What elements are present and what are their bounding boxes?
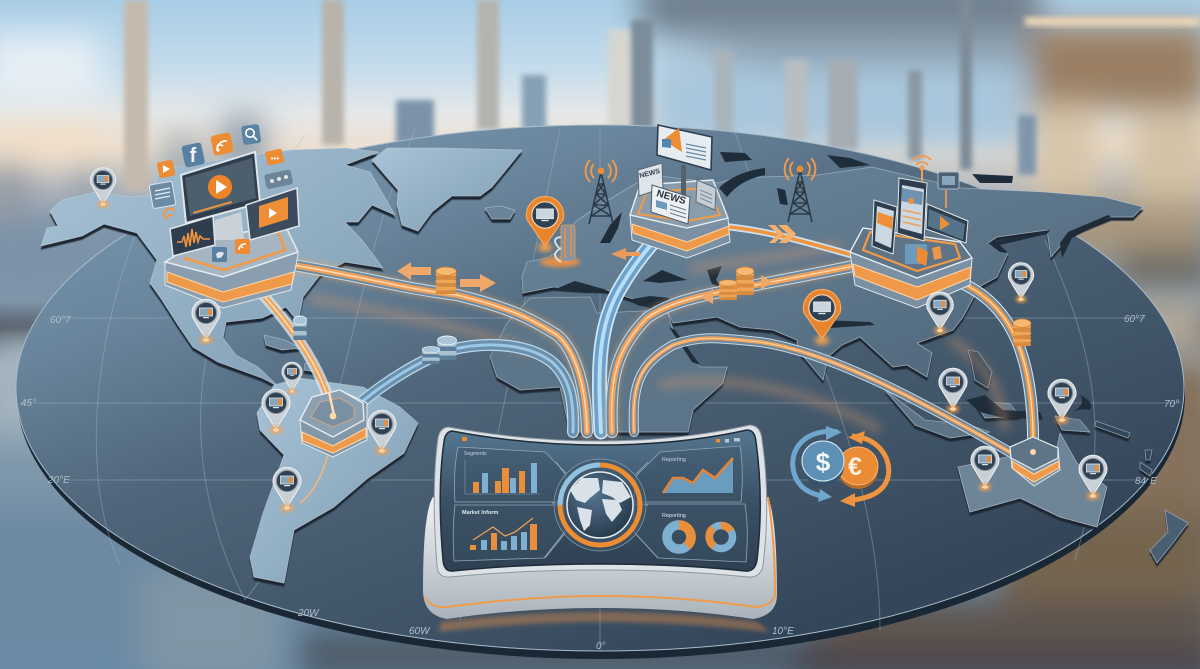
newspaper: front: NEWS	[655, 188, 687, 207]
monitor with play button	[181, 152, 260, 240]
icon: chat bubble tile	[265, 148, 284, 166]
table grid labels: 60°7	[50, 315, 71, 326]
panel: growth area chart: Reporting	[662, 457, 686, 463]
analytics dashboard device	[423, 425, 777, 632]
Australia	[958, 433, 1107, 527]
pin: Western Australia	[971, 446, 999, 490]
glowing base trim	[425, 497, 775, 607]
panel: market chart	[453, 505, 566, 561]
data flow: dashboard to Australia	[634, 338, 1020, 458]
arrow: left of coins	[397, 262, 431, 280]
Philippines	[968, 350, 992, 388]
hub: news platform	[630, 125, 730, 258]
data flow: dashboard to North America	[293, 265, 587, 432]
pin: Brazil	[368, 410, 396, 454]
pin: Japan	[1008, 263, 1034, 302]
audio waveform card	[170, 216, 215, 256]
billboard with megaphone	[657, 125, 712, 195]
panel: reporting donuts	[634, 504, 747, 562]
pin: New Guinea	[1048, 379, 1076, 424]
tablet with play button	[246, 188, 299, 240]
icon: wifi antenna	[913, 156, 931, 182]
location pins	[90, 168, 1107, 511]
hub: Australia platform	[1010, 437, 1060, 486]
pin: Colombia	[262, 389, 290, 434]
blue coins: Gulf	[293, 316, 307, 340]
orange coins: Arabia tall	[736, 267, 754, 295]
orange cycle arrows	[840, 431, 889, 507]
arrow: Arabia right	[761, 275, 772, 290]
table grid labels: 0°	[596, 641, 606, 652]
dashboard reflection	[440, 612, 770, 632]
North America	[41, 148, 395, 386]
orange coins: Arabia short	[719, 280, 737, 300]
table grid labels: 84°E	[1135, 476, 1157, 487]
panel: segments bar chart: Segments	[464, 451, 487, 457]
table grid labels: 70°	[1164, 399, 1179, 410]
icon: video tile	[157, 160, 175, 178]
central globe	[554, 459, 646, 551]
panel: market chart: Market Inform	[462, 510, 498, 516]
pin: Alaska	[90, 168, 116, 207]
tower: Europe	[586, 160, 616, 224]
hub: Asia platform	[850, 156, 972, 308]
euro coin: €	[848, 453, 862, 481]
data flow: dashboard to news hub	[599, 232, 662, 432]
chevrons on route	[768, 225, 796, 243]
hub: North America platform	[165, 225, 298, 308]
newspaper: side	[696, 180, 716, 210]
dollar coin: $	[816, 447, 831, 477]
Greenland	[372, 148, 522, 231]
pin: Chile	[273, 467, 301, 512]
icon: controls tile	[264, 169, 293, 190]
table grid labels: 60W	[409, 626, 431, 637]
Iceland	[485, 206, 515, 219]
Eurasia	[522, 167, 1143, 380]
arrow: Arabia left	[701, 289, 713, 304]
pin: Eastern Australia	[1079, 455, 1107, 500]
screen with play button	[926, 204, 968, 243]
seas and lakes dark shapes	[553, 152, 1111, 420]
blue cycle arrows	[793, 426, 842, 502]
newspaper: rear: NEWS	[639, 168, 661, 180]
data flow: North America to South America	[252, 282, 332, 412]
icon: Facebook tile: f	[190, 145, 197, 167]
donut two	[709, 525, 732, 548]
data flow: dashboard to South America	[355, 345, 573, 432]
arrow: right of coins	[460, 274, 496, 292]
silver base	[423, 497, 777, 619]
panel: segments bar chart	[454, 447, 566, 502]
round map table	[16, 125, 1185, 659]
table grid labels: 60°7	[1124, 314, 1145, 325]
hub: South America platform	[300, 390, 367, 503]
icon: small gift tile	[932, 246, 942, 260]
pin: China	[927, 292, 953, 334]
tablet	[897, 178, 927, 241]
latitude and longitude grid	[20, 128, 1180, 650]
donut one	[667, 525, 691, 549]
New Zealand	[1150, 510, 1188, 563]
icon: speaker tile	[905, 244, 928, 266]
dark screen	[440, 430, 760, 571]
table grid labels: 20°E	[47, 475, 70, 486]
table grid labels	[21, 314, 1179, 652]
data flow: news hub to Asia	[730, 227, 852, 255]
icon: article tile	[149, 181, 176, 209]
icon: wifi signal	[164, 208, 175, 220]
icon: chat bubble tile: •••	[271, 154, 279, 163]
glowing reflections on table	[310, 245, 1005, 430]
Pacific islands	[1095, 421, 1152, 476]
South America	[250, 378, 418, 583]
pin: Caribbean	[282, 362, 302, 394]
icon: social tile	[212, 247, 227, 262]
Caribbean islands	[264, 335, 318, 372]
coin stacks with arrows	[293, 225, 1031, 364]
currency exchange icon	[793, 426, 889, 507]
orange coins: Atlantic	[436, 267, 456, 294]
Africa	[490, 297, 727, 432]
pin: Malaysia	[939, 368, 967, 412]
connector lines	[545, 462, 658, 558]
phone	[872, 200, 897, 254]
industrial cluster in Europe	[540, 225, 580, 267]
pin: Mexico	[192, 299, 220, 344]
orange coins: Pacific	[1013, 319, 1031, 346]
table grid labels: 45°	[21, 398, 36, 409]
table grid labels: 10°E	[772, 626, 794, 637]
continents	[41, 148, 1188, 583]
icon: search tile	[241, 124, 261, 145]
blue coins: Atlantic upper	[437, 336, 457, 360]
data flow: Asia to Australia	[955, 280, 1033, 452]
Indonesia	[885, 390, 1090, 438]
panel: reporting donuts: Reporting	[662, 513, 686, 519]
small status icons	[462, 437, 740, 442]
screen bezel	[434, 425, 767, 577]
icon: RSS tile	[210, 132, 234, 156]
radio towers	[586, 158, 815, 224]
table grid labels: 20W	[297, 608, 320, 619]
icon: RSS badge	[235, 239, 250, 254]
blue coins: Atlantic lower	[422, 346, 440, 364]
data flow: dashboard to Asia	[612, 265, 858, 432]
tower: Russia	[785, 158, 815, 222]
pin: Europe highlighted	[526, 197, 564, 252]
icon cluster: media devices	[149, 124, 299, 262]
icon: small monitor on post	[938, 172, 959, 208]
panel: growth area chart	[634, 446, 742, 502]
pin: India highlighted	[803, 290, 841, 345]
icon: Facebook tile	[181, 142, 205, 168]
arrow: Europe flow	[611, 248, 640, 260]
